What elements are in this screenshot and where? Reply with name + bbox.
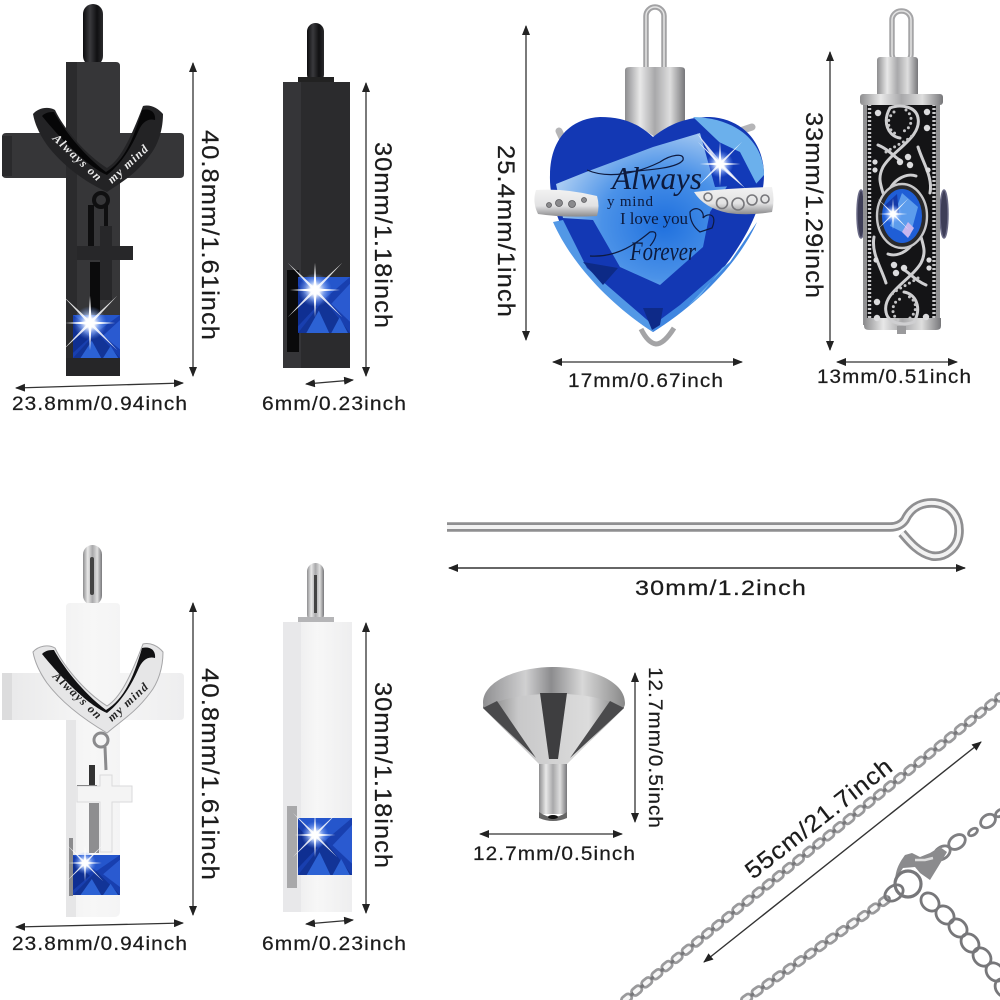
dimension: width 6mm: 6mm/0.23inch bbox=[262, 934, 407, 955]
icon: black cross pendant bbox=[2, 4, 184, 376]
dimension: height 33mm: 33mm/1.29inch bbox=[800, 112, 827, 299]
dimension: width 12.7mm: 12.7mm/0.5inch bbox=[473, 844, 636, 865]
curved band with engraving bbox=[33, 106, 163, 192]
curved band with engraving: Always on bbox=[52, 136, 100, 181]
panel: filigree tube pendant bbox=[800, 11, 972, 388]
gemstone bbox=[67, 838, 120, 896]
prongs bbox=[559, 127, 752, 146]
curved band with engraving: my mind bbox=[108, 682, 148, 722]
dimension: width 17mm: 17mm/0.67inch bbox=[568, 371, 724, 392]
sparkle bbox=[697, 133, 745, 188]
side gems bbox=[857, 190, 948, 238]
panel: silver cross pendant bbox=[2, 545, 223, 955]
gemstone bbox=[293, 813, 352, 875]
panel: eye pin bbox=[447, 503, 965, 600]
engraving: y mind bbox=[607, 194, 654, 210]
filigree swirls bbox=[872, 106, 931, 195]
dimension: width 23.8mm bbox=[12, 923, 188, 955]
dimension: length 55cm: 55cm/21.7inch bbox=[740, 753, 899, 885]
oval blue gem bbox=[877, 184, 927, 248]
dimension: height 40.8mm: 40.8mm/1.61inch bbox=[196, 130, 223, 341]
icon: chain bbox=[625, 697, 1000, 1000]
icon: black bar pendant bbox=[283, 23, 350, 368]
panel: silver bar pendant bbox=[262, 563, 407, 955]
chain link bbox=[94, 733, 108, 770]
curved band with engraving: Always on bbox=[52, 674, 100, 719]
icon: blue heart pendant bbox=[534, 7, 774, 344]
panel: black bar pendant bbox=[262, 23, 407, 415]
engraving bbox=[587, 155, 714, 266]
gemstone bbox=[288, 263, 350, 333]
dimension: width 23.8mm: 23.8mm/0.94inch bbox=[12, 934, 188, 955]
dimension: length 55cm bbox=[704, 742, 981, 962]
dimension: width 6mm bbox=[262, 380, 407, 415]
dimension: height 30mm: 30mm/1.18inch bbox=[369, 682, 396, 869]
panel: blue heart pendant bbox=[492, 7, 774, 392]
panel: funnel bbox=[473, 667, 665, 865]
dimension: width 6mm: 6mm/0.23inch bbox=[262, 394, 407, 415]
clasp bbox=[882, 847, 947, 904]
icon: funnel bbox=[483, 667, 625, 821]
icon: silver cross pendant bbox=[2, 545, 184, 917]
dimension: height 40.8mm: 40.8mm/1.61inch bbox=[196, 668, 223, 881]
gemstone bbox=[63, 296, 120, 358]
dimension: width 13mm: 13mm/0.51inch bbox=[817, 367, 972, 388]
panel: black cross pendant bbox=[2, 4, 223, 415]
extension links bbox=[917, 889, 1000, 1000]
dimension: width 23.8mm: 23.8mm/0.94inch bbox=[12, 394, 188, 415]
dimension: height 25.4mm: 25.4mm/1inch bbox=[492, 145, 519, 318]
curved band with engraving bbox=[32, 643, 164, 734]
upper chain links after clasp bbox=[931, 808, 1000, 863]
curved band with engraving: my mind bbox=[108, 144, 148, 184]
panel: chain bbox=[625, 697, 1000, 1000]
engraving: Forever bbox=[629, 237, 697, 266]
engraving: Always bbox=[610, 160, 702, 196]
lower filigree swirls bbox=[873, 235, 932, 324]
hanging small cross bbox=[77, 193, 133, 300]
dimension: height 30mm: 30mm/1.18inch bbox=[369, 142, 396, 329]
icon: filigree tube pendant bbox=[857, 11, 948, 334]
dimension: length 30mm: 30mm/1.2inch bbox=[635, 577, 807, 600]
icon: silver bar pendant bbox=[283, 563, 352, 912]
heart gemstone bbox=[550, 117, 764, 332]
dimension: height 12.7mm: 12.7mm/0.5inch bbox=[644, 667, 665, 829]
dimension: width 6mm bbox=[262, 920, 407, 955]
engraving: I love you bbox=[620, 209, 688, 228]
silver ring bands bbox=[534, 187, 774, 217]
dimension: width 23.8mm bbox=[12, 383, 188, 415]
icon: eye pin bbox=[447, 503, 959, 556]
